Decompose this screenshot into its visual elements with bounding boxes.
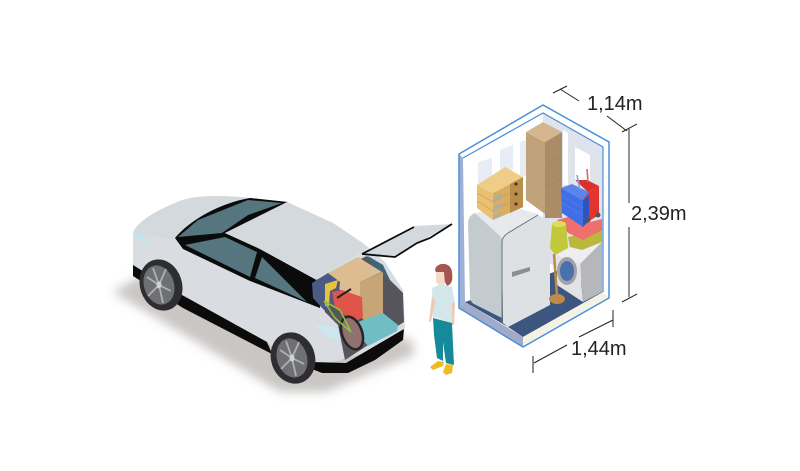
washing machine [557,242,602,302]
box labels [510,177,523,213]
left post [459,154,465,308]
dimension: depth 1,14m [553,86,643,132]
person [429,264,455,375]
green box [568,230,602,250]
roof [225,202,368,278]
dimension: depth 1,14m: 1,14m [587,93,643,115]
floor lamp [549,221,568,304]
tan boxes [477,167,523,220]
car [113,196,452,392]
bicycle [324,289,367,352]
floor [465,270,603,337]
windshield [178,200,282,237]
car shadow [113,276,414,392]
fridge handle [512,267,530,277]
front side window [185,237,257,277]
tall boxes [526,122,562,218]
floor right edge [523,292,609,347]
right wall [543,113,603,292]
cargo boxes [328,257,382,305]
hair [435,264,452,286]
tail light [315,325,342,340]
dimension: width 1,44m: 1,44m [571,338,627,360]
rear side window [255,257,307,302]
rear bumper [312,329,404,373]
cargo blue bag [312,273,340,310]
black skirt [133,265,272,354]
unit frame [459,105,609,347]
car cargo [312,257,398,352]
tailgate edge [362,224,452,257]
dimension: height 2,39m [622,129,689,302]
blue suitcase [561,175,590,227]
cargo red suitcases [332,290,363,322]
face [436,272,445,287]
trunk interior [316,256,404,360]
rear window glimpse [368,256,390,280]
shirt [432,284,455,323]
car body [133,196,405,368]
dimension: width 1,44m [533,310,627,373]
wall light panels [575,147,590,182]
pink box [557,216,602,240]
floor left edge [459,302,523,347]
storage unit [459,105,609,347]
arms [429,296,455,325]
rear wheel [264,326,322,390]
red suitcase [575,169,600,222]
front wheel [133,254,189,316]
shoes [430,361,453,375]
tailgate [362,224,452,256]
fridge [468,206,550,327]
window frame [175,198,322,308]
dimension: height 2,39m: 2,39m [631,203,687,225]
hood [133,196,250,240]
roof inner edge [463,113,603,292]
headlight [134,230,147,243]
cargo teal cushion [358,313,398,346]
trousers [433,318,454,365]
left wall panels [478,158,492,190]
